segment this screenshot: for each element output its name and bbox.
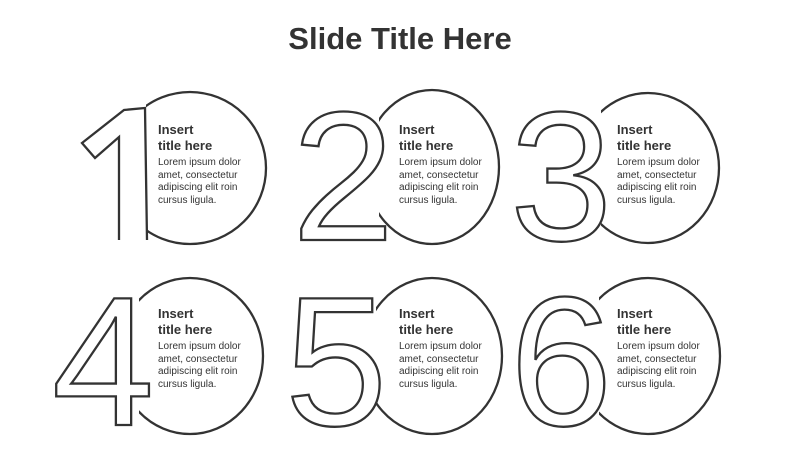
circle 2: [365, 90, 499, 244]
text block 2: title here: [399, 138, 453, 153]
text block 6: [617, 306, 700, 390]
text block 1: [158, 122, 241, 206]
text block 5: [399, 306, 482, 390]
text block 3: [617, 122, 700, 206]
text block 4: [158, 306, 241, 390]
text block 6: title here: [617, 322, 671, 337]
text block 1: Insert: [158, 122, 193, 137]
circle 5: [362, 278, 502, 434]
text block 5: title here: [399, 322, 453, 337]
text block 4: Insert: [158, 306, 193, 321]
text block 5: Insert: [399, 306, 434, 321]
text block 6: Insert: [617, 306, 652, 321]
text block 3: Insert: [617, 122, 652, 137]
circle 6: [599, 276, 722, 436]
text block 1: Lorem ipsum dolor amet, consectetur adipiscing elit roin cursus ligula.: [158, 157, 241, 206]
text block 2: [399, 122, 482, 206]
text block 5: Lorem ipsum dolor amet, consectetur adipiscing elit roin cursus ligula.: [399, 341, 482, 390]
digit 1: [82, 108, 147, 240]
text block 2: Lorem ipsum dolor amet, consectetur adipiscing elit roin cursus ligula.: [399, 157, 482, 206]
circle 4: [139, 276, 264, 436]
text block 3: Lorem ipsum dolor amet, consectetur adipiscing elit roin cursus ligula.: [617, 157, 700, 206]
text block 1: title here: [158, 138, 212, 153]
digit 3: 3: [510, 73, 612, 279]
text block 2: Insert: [399, 122, 434, 137]
text block 4: title here: [158, 322, 212, 337]
circle 3: [601, 92, 720, 244]
text block 3: title here: [617, 138, 671, 153]
circle 1: [146, 90, 268, 246]
graphics: numbers and circles: [55, 88, 722, 436]
title: Slide Title Here: [288, 21, 512, 56]
digit 2: 2: [292, 73, 394, 279]
text block 4: Lorem ipsum dolor amet, consectetur adipiscing elit roin cursus ligula.: [158, 341, 241, 390]
text block 6: Lorem ipsum dolor amet, consectetur adipiscing elit roin cursus ligula.: [617, 341, 700, 390]
